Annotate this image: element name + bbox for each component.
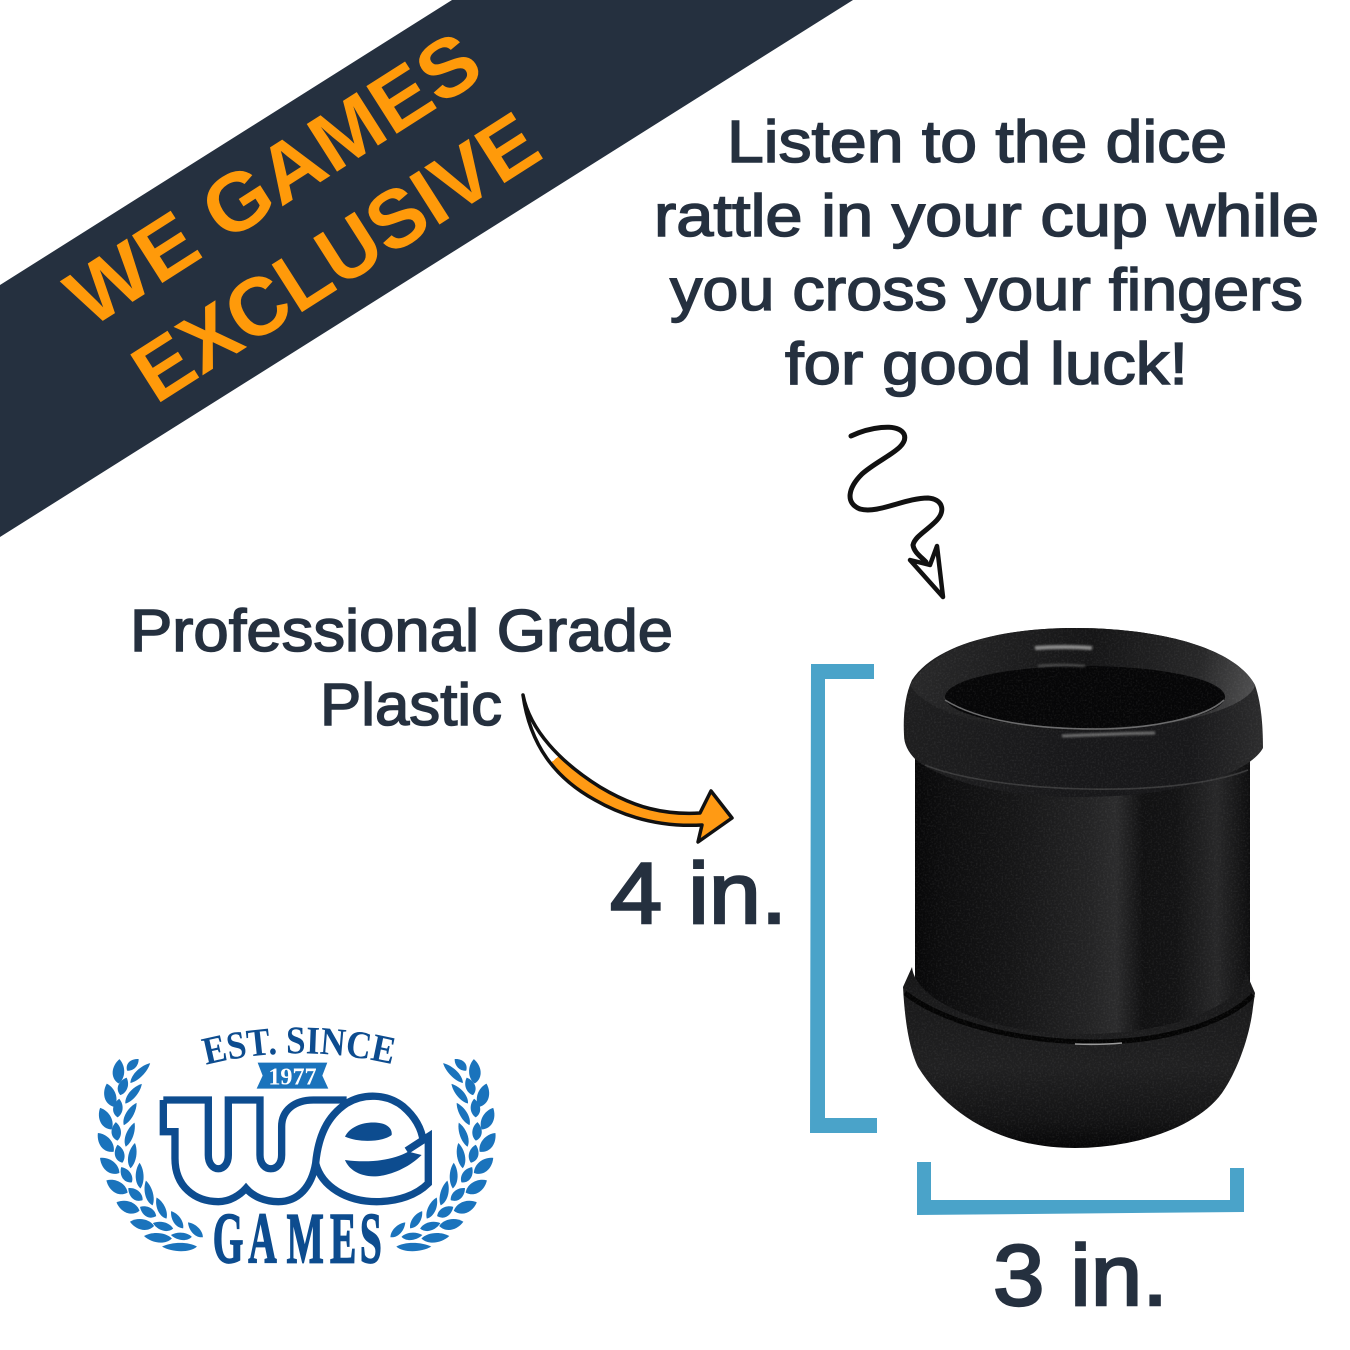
banner text line 2: EXCLUSIVE (117, 95, 555, 420)
callout: listen to the dice: you cross your fingers (670, 257, 1303, 323)
rim top annulus (910, 628, 1255, 731)
arrow: orange curved arrow (523, 695, 732, 842)
surface grain (900, 625, 1265, 1150)
rim highlights (1035, 647, 1155, 736)
logo: WE Games: EST. SINCE (200, 1027, 394, 1065)
banner text line 1: WE GAMES (51, 14, 497, 344)
callout: listen to the dice: rattle in your cup while (654, 183, 1319, 249)
label: 4 in.: 4 in. (610, 846, 787, 942)
label: professional grade plastic: Professional Grade (130, 598, 673, 664)
laurel wreath right (388, 1056, 500, 1251)
logo: WE Games (98, 1027, 496, 1279)
bracket: width (917, 1162, 1244, 1215)
callout: listen to the dice: for good luck! (785, 331, 1188, 397)
callout: listen to the dice (654, 109, 1319, 397)
EST. SINCE (206, 1053, 395, 1065)
dice cup (900, 625, 1265, 1150)
laurel wreath left (93, 1056, 205, 1251)
opening rim line (945, 700, 1224, 729)
label: professional grade plastic: Plastic (320, 672, 502, 738)
1977 ribbon: 1977 (268, 1063, 317, 1090)
label: professional grade plastic (130, 598, 673, 738)
WE wordmark (163, 1096, 428, 1202)
rim lower shadow line (925, 765, 1248, 789)
callout: listen to the dice: Listen to the dice (727, 109, 1227, 175)
banner: WE Games Exclusive (0, 0, 853, 537)
cup body (915, 745, 1250, 1036)
GAMES: GAMES (213, 1198, 382, 1279)
label: 3 in.: 3 in. (993, 1228, 1168, 1324)
groove highlight (1075, 1043, 1122, 1044)
bracket: height (810, 664, 877, 1133)
cup opening (945, 666, 1225, 728)
cup base (903, 967, 1255, 1148)
1977 ribbon (257, 1063, 328, 1090)
cup rim side (904, 628, 1263, 797)
arrow: squiggle pointing to cup (850, 427, 943, 597)
base groove (905, 993, 1253, 1042)
